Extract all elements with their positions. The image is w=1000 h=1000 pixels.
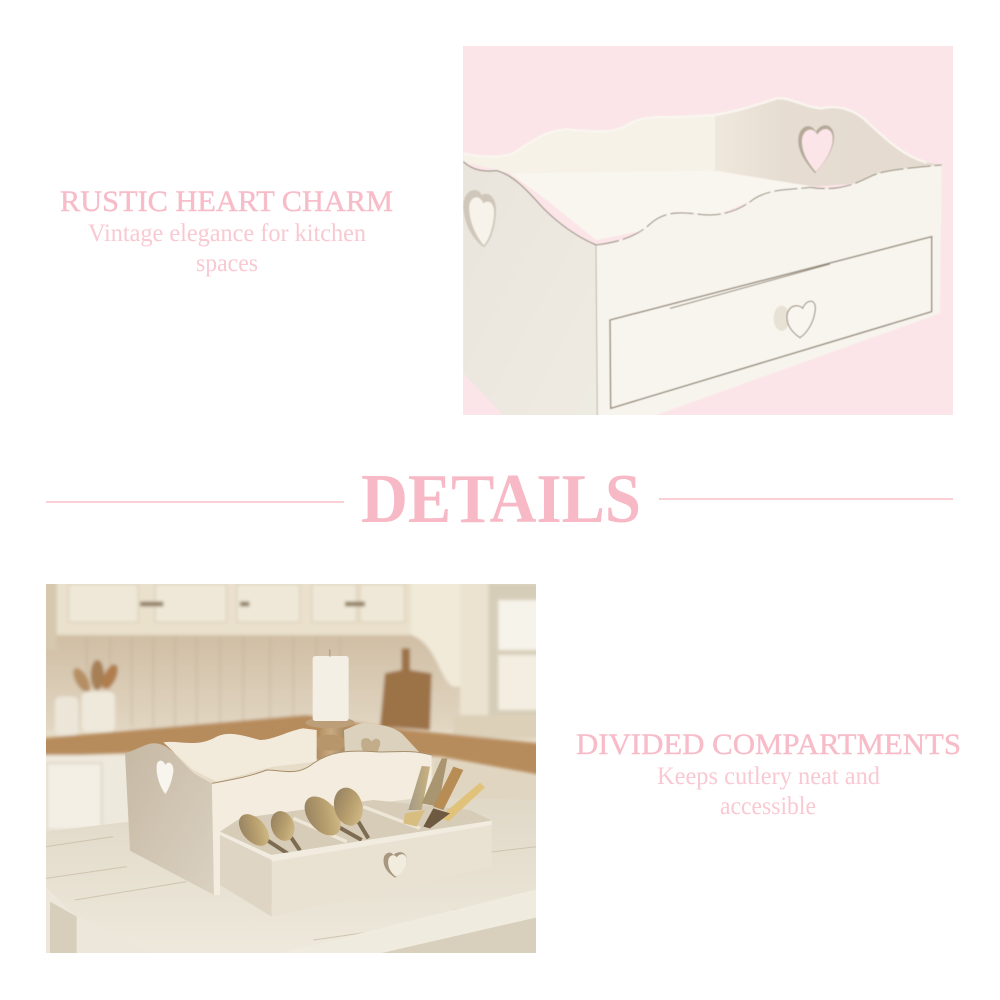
beadboard stripes bbox=[87, 637, 340, 727]
icon: back heart cutout bbox=[361, 738, 380, 752]
drawer front bbox=[272, 821, 492, 917]
back wall interior bbox=[464, 116, 714, 173]
hood corbel bbox=[412, 580, 463, 687]
interior floor bbox=[510, 171, 813, 240]
icon: heart cutout left bbox=[463, 190, 496, 247]
heading: divided compartments: DIVIDED COMPARTMENTS bbox=[576, 728, 961, 761]
table plank lines bbox=[46, 837, 537, 940]
organizer scalloped edge bbox=[212, 751, 432, 783]
utensils in crock bbox=[55, 660, 121, 735]
left side face bbox=[463, 162, 597, 418]
table left front edge bbox=[46, 888, 149, 953]
lower cabinet right bbox=[436, 762, 536, 780]
caption: keeps cutlery line 2: accessible bbox=[720, 793, 816, 820]
drawer interior bbox=[220, 800, 492, 855]
heading: rustic heart charm: RUSTIC HEART CHARM bbox=[60, 185, 393, 218]
drawer side bbox=[220, 835, 272, 917]
caption: vintage elegance line 2: spaces bbox=[196, 250, 258, 277]
organizer interior wall bbox=[163, 728, 317, 782]
icon: side heart cutout bbox=[157, 761, 173, 794]
spoons bbox=[233, 784, 368, 854]
table left apron bbox=[50, 902, 77, 955]
organizer front face bbox=[212, 751, 432, 895]
text block: divided compartments bbox=[576, 728, 961, 820]
icon: heart knob bbox=[774, 301, 815, 338]
icon: heart cutout right bbox=[798, 125, 834, 173]
drawer bbox=[610, 237, 932, 408]
left rim edge line bbox=[463, 162, 596, 245]
photo: organizer in a farmhouse kitchen bbox=[40, 580, 542, 955]
heading: details: DETAILS bbox=[361, 461, 641, 538]
icon: drawer heart knob bbox=[384, 852, 407, 878]
lower cabinet left bbox=[40, 755, 130, 835]
upper cabinets bbox=[56, 600, 413, 636]
table top bbox=[40, 797, 540, 955]
knives bbox=[403, 758, 485, 828]
divider: right rule bbox=[659, 498, 953, 500]
spoon: front pair bbox=[262, 833, 300, 854]
window bbox=[459, 584, 486, 715]
table right apron bbox=[382, 918, 536, 953]
caption: vintage elegance line 1: Vintage elegance for kitchen bbox=[88, 220, 366, 247]
candle holder bbox=[305, 717, 355, 760]
back rim edge bbox=[463, 98, 927, 163]
front scalloped edge bbox=[596, 165, 942, 245]
left cabinet edge bbox=[46, 584, 58, 640]
organizer back right wall with heart bbox=[344, 723, 419, 752]
front face bbox=[596, 165, 942, 418]
divider: left rule bbox=[46, 501, 344, 503]
text block: rustic heart charm bbox=[60, 185, 393, 277]
drawer top rim bbox=[220, 821, 492, 862]
cutting board bbox=[380, 648, 432, 730]
caption: keeps cutlery line 1: Keeps cutlery neat and bbox=[657, 763, 880, 790]
right inner wall bbox=[715, 98, 942, 187]
drawer scratch bbox=[670, 264, 830, 308]
spoon: rear pair bbox=[335, 822, 368, 840]
blurred kitchen background bbox=[40, 580, 542, 835]
photo: white heart organizer on pink background bbox=[463, 46, 953, 418]
wood counter bbox=[40, 715, 540, 775]
corner edge bbox=[596, 245, 597, 418]
table right front edge bbox=[294, 890, 536, 953]
drawer dividers bbox=[293, 807, 420, 842]
organizer side face bbox=[125, 743, 214, 895]
beadboard wall bbox=[40, 630, 463, 730]
candle bbox=[313, 649, 349, 721]
